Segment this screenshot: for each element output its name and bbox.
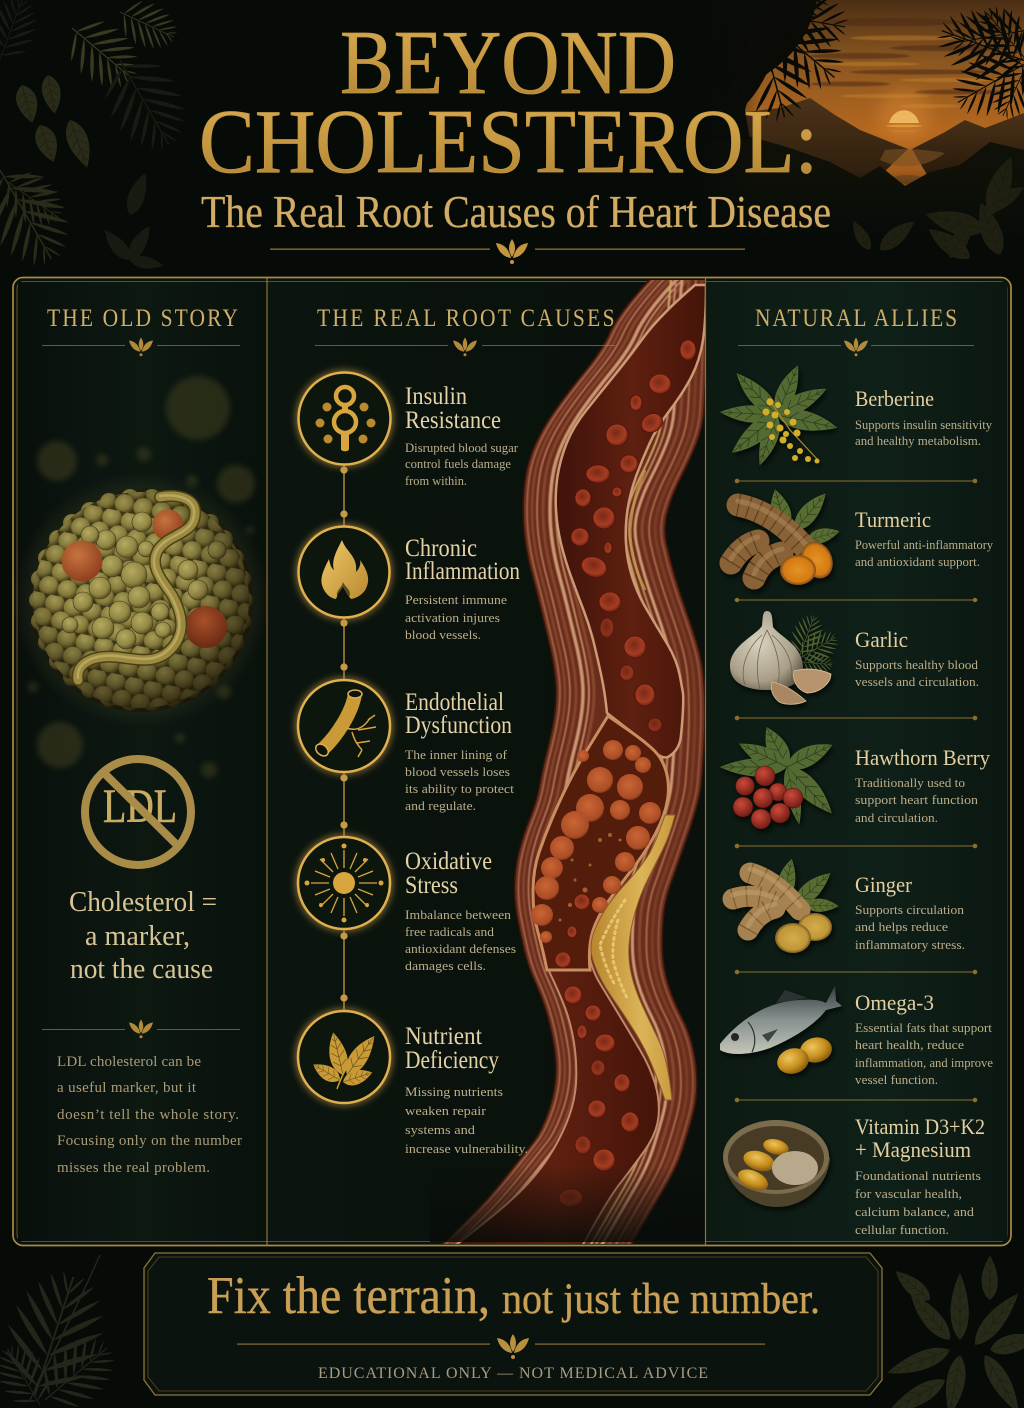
icon: radiating sun — [298, 837, 390, 929]
slogan: Fix the terrain, — [207, 1267, 490, 1325]
description: inflammation, and improve — [855, 1055, 993, 1070]
icon: berberine plant — [719, 362, 839, 468]
lower lumen — [450, 947, 659, 1250]
footer foliage left — [0, 1255, 129, 1408]
slogan — [207, 1267, 820, 1325]
item: omega-3 — [720, 986, 993, 1087]
icon: hawthorn berries — [720, 723, 839, 829]
panel: the real root causes — [268, 270, 712, 1256]
description: and circulation. — [855, 810, 938, 825]
panel: the old story — [13, 282, 269, 1241]
icon: turmeric root — [731, 487, 841, 585]
description: for vascular health, — [855, 1186, 962, 1201]
title: Stress — [405, 872, 458, 899]
description — [855, 657, 979, 689]
explanation text: doesn’t tell the whole story. — [57, 1107, 239, 1123]
item: berberine — [719, 362, 992, 468]
molecule: LDL particle — [24, 483, 258, 717]
title: BEYOND — [340, 12, 676, 113]
explanation text: a useful marker, but it — [57, 1080, 197, 1096]
description: systems and — [405, 1122, 476, 1137]
title: Vitamin D3+K2 — [855, 1114, 985, 1139]
blurred background particles — [28, 376, 255, 778]
section divider — [42, 1020, 240, 1038]
title — [405, 535, 520, 585]
title: Chronic — [405, 535, 477, 562]
upper lumen — [556, 285, 706, 757]
disclaimer: EDUCATIONAL ONLY — NOT MEDICAL ADVICE — [318, 1365, 708, 1382]
description — [855, 537, 993, 569]
footer foliage right — [882, 1255, 1024, 1408]
column dividers — [267, 278, 706, 1245]
description — [405, 907, 516, 973]
description: inflammatory stress. — [855, 937, 965, 952]
description — [405, 592, 507, 642]
plaque core — [533, 716, 668, 970]
description: calcium balance, and — [855, 1204, 975, 1219]
title: Turmeric — [855, 507, 931, 532]
description: blood vessels loses — [405, 764, 510, 779]
heading divider — [42, 338, 240, 356]
title — [199, 12, 818, 192]
description: increase vulnerability. — [405, 1141, 528, 1156]
illustration: artery cross-section — [430, 270, 712, 1256]
heading: THE REAL ROOT CAUSES — [317, 305, 615, 332]
marker statement: Cholesterol = — [69, 887, 217, 918]
marker statement: not the cause — [70, 954, 213, 985]
description — [405, 440, 519, 488]
icon: ginger root — [733, 857, 839, 953]
description: support heart function — [855, 792, 979, 807]
item: hawthorn berry — [720, 723, 990, 829]
slogan: not just the number. — [502, 1276, 820, 1323]
main frame — [13, 278, 1011, 1246]
description: Essential fats that support — [855, 1020, 992, 1035]
description — [405, 747, 514, 813]
description: vessel function. — [855, 1072, 938, 1087]
cause: chronic inflammation — [298, 526, 520, 642]
title: Garlic — [855, 627, 908, 652]
icon: golden leaves — [298, 1011, 390, 1103]
marker statement — [69, 887, 217, 985]
wall stripes — [434, 270, 708, 1256]
title divider — [270, 239, 745, 264]
panel: natural allies — [706, 282, 1007, 1241]
title — [405, 1023, 499, 1074]
title — [405, 383, 501, 434]
artery fade at bottom — [430, 1165, 705, 1242]
icon: no LDL sign: LDL — [103, 780, 177, 833]
mountains — [745, 98, 1024, 184]
title — [855, 1114, 985, 1162]
title: Resistance — [405, 407, 501, 434]
footer banner — [144, 1253, 882, 1395]
description: Supports healthy blood — [855, 657, 979, 672]
explanation text: Focusing only on the number — [57, 1133, 242, 1149]
description: and regulate. — [405, 798, 476, 813]
banner divider — [237, 1334, 765, 1359]
description: blood vessels. — [405, 627, 481, 642]
icon: no LDL sign — [85, 759, 191, 865]
red blood cells — [555, 340, 696, 1207]
palm fronds: top right — [697, 0, 1024, 131]
description: its ability to protect — [405, 781, 514, 796]
description: Disrupted blood sugar — [405, 440, 519, 455]
title: + Magnesium — [855, 1137, 971, 1162]
plaque speckle — [558, 833, 622, 922]
heading divider — [315, 338, 615, 356]
clouds — [810, 18, 1010, 108]
description: antioxidant defenses — [405, 941, 516, 956]
yellow fatty plaque — [591, 470, 675, 1100]
red nodules — [62, 540, 102, 582]
plaque lumps — [531, 740, 661, 943]
title: Inflammation — [405, 558, 520, 585]
item: turmeric — [731, 487, 993, 585]
description — [855, 902, 965, 952]
explanation text: misses the real problem. — [57, 1160, 210, 1176]
dark palm mass — [700, 0, 817, 140]
item: garlic — [730, 610, 979, 704]
icon: blood vessel — [298, 680, 390, 772]
description: Powerful anti-inflammatory — [855, 537, 993, 552]
separators — [735, 479, 977, 1102]
icon: flame — [298, 526, 390, 618]
description: and antioxidant support. — [855, 554, 980, 569]
subtitle: The Real Root Causes of Heart Disease — [201, 187, 831, 237]
title: Deficiency — [405, 1047, 499, 1074]
title: Dysfunction — [405, 712, 512, 739]
description: damages cells. — [405, 958, 486, 973]
description: free radicals and — [405, 924, 495, 939]
description — [405, 1084, 528, 1156]
foliage: lower right of header — [848, 153, 1024, 266]
cause: insulin resistance — [298, 372, 519, 488]
title: Nutrient — [405, 1023, 482, 1050]
description: Missing nutrients — [405, 1084, 503, 1099]
marker statement: a marker, — [85, 921, 190, 952]
description: Persistent immune — [405, 592, 507, 607]
description: and helps reduce — [855, 919, 948, 934]
description: weaken repair — [405, 1103, 487, 1118]
description: Traditionally used to — [855, 775, 965, 790]
description — [855, 1020, 993, 1087]
item: ginger — [733, 857, 965, 953]
description: Foundational nutrients — [855, 1168, 981, 1183]
title — [405, 689, 512, 739]
icon: garlic bulb — [730, 610, 845, 704]
description: Supports circulation — [855, 902, 965, 917]
artery wall — [430, 270, 712, 1256]
foliage: upper left — [0, 0, 203, 282]
cause: nutrient deficiency — [298, 1011, 528, 1156]
icon: bowl of supplements — [723, 1120, 830, 1207]
title: Oxidative — [405, 848, 492, 875]
description: activation injures — [405, 610, 500, 625]
description: control fuels damage — [405, 456, 511, 471]
description — [855, 417, 992, 448]
title — [405, 848, 492, 899]
explanation text — [57, 1054, 242, 1176]
description: cellular function. — [855, 1222, 949, 1237]
title: Endothelial — [405, 689, 504, 716]
bumpy rim — [29, 489, 253, 711]
description: Supports insulin sensitivity — [855, 417, 992, 432]
description: Imbalance between — [405, 907, 512, 922]
heading: THE OLD STORY — [47, 305, 238, 332]
cause: oxidative stress — [298, 837, 516, 973]
item: vitamin d3 k2 magnesium — [723, 1114, 985, 1237]
protein strand — [78, 495, 195, 680]
timeline connectors — [341, 464, 347, 1010]
title: Berberine — [855, 386, 934, 411]
description — [855, 775, 979, 825]
heading: NATURAL ALLIES — [755, 305, 957, 332]
title: Hawthorn Berry — [855, 745, 990, 770]
description: from within. — [405, 473, 467, 488]
heading divider — [738, 338, 974, 356]
title: Omega-3 — [855, 990, 934, 1015]
sun — [878, 90, 930, 142]
frame lines on top — [13, 278, 1011, 1246]
description: vessels and circulation. — [855, 674, 979, 689]
description: heart health, reduce — [855, 1037, 964, 1052]
icon: fish and capsules — [720, 986, 842, 1077]
title: Insulin — [405, 383, 467, 410]
cause: endothelial dysfunction — [298, 680, 514, 813]
sunset landscape — [745, 0, 1024, 186]
explanation text: LDL cholesterol can be — [57, 1054, 201, 1070]
title: Ginger — [855, 872, 913, 897]
description: The inner lining of — [405, 747, 508, 762]
description — [855, 1168, 981, 1237]
description: and healthy metabolism. — [855, 433, 981, 448]
jungle silhouette — [703, 136, 1024, 227]
title: CHOLESTEROL: — [199, 91, 818, 192]
icon: insulin key — [298, 372, 390, 464]
